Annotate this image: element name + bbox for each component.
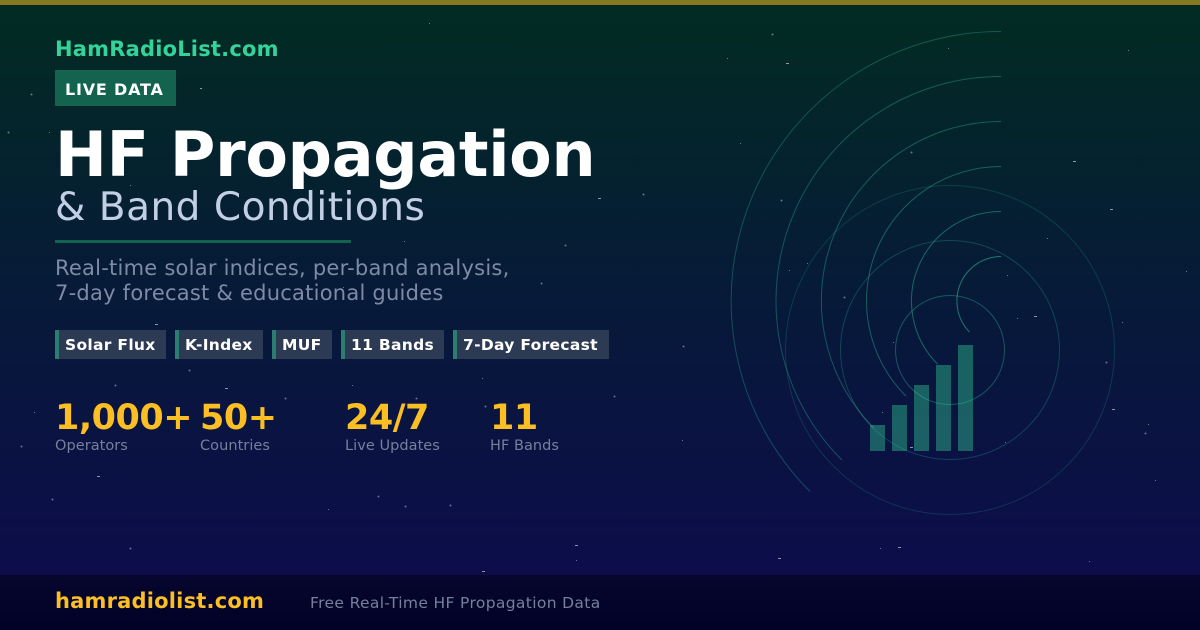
chip: 11 bands: 11 Bands bbox=[351, 336, 434, 354]
description: Real-time solar indices, per-band analysis, bbox=[55, 256, 510, 280]
stat: live updates: 24/7 bbox=[345, 398, 429, 438]
stat: live updates bbox=[345, 398, 440, 454]
concentric rings bbox=[786, 186, 1114, 514]
stat: operators: Operators bbox=[55, 438, 128, 454]
chip: 11 bands bbox=[341, 330, 444, 359]
chip: k-index: K-Index bbox=[185, 336, 253, 354]
top accent bar bbox=[0, 0, 1200, 5]
footer tagline: Free Real-Time HF Propagation Data bbox=[310, 594, 601, 612]
divider bbox=[55, 240, 351, 243]
stat: live updates: Live Updates bbox=[345, 438, 440, 454]
chip: solar flux: Solar Flux bbox=[65, 336, 156, 354]
live data badge bbox=[55, 70, 176, 106]
footer band bbox=[0, 575, 1200, 630]
feature chips bbox=[55, 330, 609, 359]
description bbox=[55, 256, 510, 305]
stat: hf bands: HF Bands bbox=[490, 438, 559, 454]
propagation arcs bbox=[731, 31, 1001, 491]
stat: operators: 1,000+ bbox=[55, 398, 192, 438]
footer url: hamradiolist.com bbox=[55, 589, 264, 613]
live data badge: LIVE DATA bbox=[65, 80, 164, 99]
stat: hf bands bbox=[490, 398, 559, 454]
description: 7-day forecast & educational guides bbox=[55, 281, 444, 305]
subtitle: & Band Conditions bbox=[55, 185, 425, 230]
signal bars bbox=[870, 345, 973, 451]
chip: 7-day forecast bbox=[453, 330, 609, 359]
brand name: HamRadioList.com bbox=[55, 37, 279, 61]
stat: countries: 50+ bbox=[200, 398, 277, 438]
chip: 7-day forecast: 7-Day Forecast bbox=[463, 336, 598, 354]
chip: k-index bbox=[175, 330, 263, 359]
stat: hf bands: 11 bbox=[490, 398, 538, 438]
stat: countries: Countries bbox=[200, 438, 270, 454]
chip: muf: MUF bbox=[282, 336, 322, 354]
chip: muf bbox=[272, 330, 332, 359]
chip: solar flux bbox=[55, 330, 166, 359]
title: HF Propagation bbox=[55, 118, 595, 191]
stats row bbox=[55, 398, 559, 454]
